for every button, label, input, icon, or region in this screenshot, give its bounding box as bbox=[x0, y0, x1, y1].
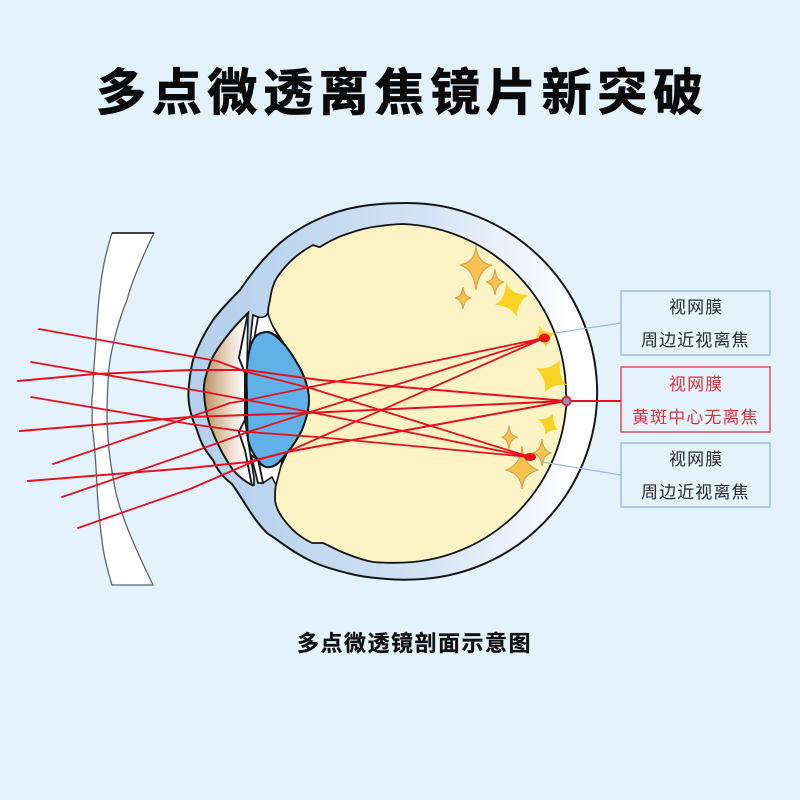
ray to lower focus 3 bbox=[31, 397, 530, 457]
star tan small top bbox=[486, 269, 504, 295]
ray to centre focus 3 bbox=[28, 401, 566, 481]
eye bbox=[188, 203, 597, 580]
callout: macula centre bbox=[621, 367, 770, 432]
iris top bbox=[239, 313, 248, 373]
leader lines bbox=[542, 323, 621, 475]
star gold middle bbox=[535, 360, 567, 392]
stars bbox=[455, 245, 567, 489]
lens cross-section bbox=[92, 233, 154, 585]
ray to upper focus 1 bbox=[53, 338, 544, 464]
star gold lower bbox=[537, 414, 558, 435]
ray to callout bbox=[566, 400, 621, 402]
callout: macula centre: 黄斑中心无离焦 bbox=[632, 408, 759, 427]
star gold focus top bbox=[535, 325, 555, 348]
star tan lower large bbox=[506, 446, 538, 489]
caption: 多点微透镜剖面示意图 bbox=[297, 631, 532, 656]
callout: peripheral top: 视网膜 bbox=[669, 298, 723, 317]
ray to centre focus 1 bbox=[18, 370, 566, 401]
suspensory bottom bbox=[251, 455, 263, 483]
star gold top bbox=[495, 283, 528, 317]
star tan lower small bbox=[502, 426, 517, 449]
iris bottom bbox=[239, 420, 254, 485]
callout: peripheral top: 周边近视离焦 bbox=[641, 331, 750, 350]
ray to lower focus 2 bbox=[31, 362, 530, 457]
callout: peripheral bottom: 周边近视离焦 bbox=[641, 483, 750, 502]
suspensory top bbox=[248, 315, 258, 362]
focus point upper bbox=[539, 334, 550, 342]
focus point macula bbox=[562, 397, 571, 405]
callout: peripheral bottom: 视网膜 bbox=[669, 450, 723, 469]
vitreous body bbox=[268, 224, 568, 563]
red rays bbox=[18, 329, 621, 528]
ray to lower focus 1 bbox=[39, 329, 530, 457]
star tan small left bbox=[455, 287, 471, 309]
callout: macula centre: 视网膜 bbox=[669, 375, 723, 394]
title: 多点微透离焦镜片新突破 bbox=[96, 65, 709, 121]
star tan lower right bbox=[533, 439, 551, 466]
anterior chamber bbox=[204, 313, 252, 485]
ray to upper focus 3 bbox=[78, 338, 544, 528]
callout: peripheral top bbox=[621, 291, 770, 355]
callout: peripheral bottom bbox=[621, 443, 770, 507]
star tan large top bbox=[460, 245, 492, 290]
ray to upper focus 2 bbox=[62, 338, 544, 497]
ciliary gap bottom bbox=[259, 458, 283, 485]
ray to centre focus 2 bbox=[20, 401, 566, 431]
crystalline lens bbox=[247, 332, 309, 467]
focus point lower bbox=[524, 453, 536, 461]
sclera bbox=[188, 203, 597, 580]
ciliary gap top bbox=[253, 313, 283, 343]
